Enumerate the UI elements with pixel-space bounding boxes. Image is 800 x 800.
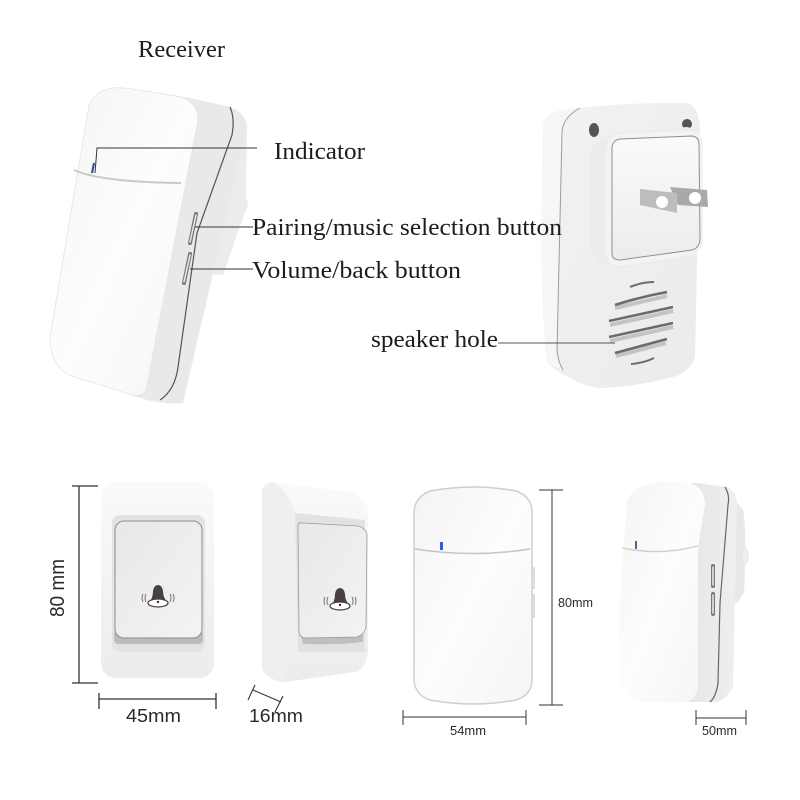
side seam — [710, 487, 729, 702]
receiver seam — [160, 107, 233, 400]
16mm depth dimension — [248, 685, 283, 712]
face groove — [74, 170, 181, 183]
angled plate left edge — [262, 482, 298, 681]
speaker slot highlights — [610, 296, 673, 356]
receiver side view — [619, 482, 748, 702]
side buttons — [711, 566, 715, 614]
receiver front view — [414, 487, 534, 704]
volume button — [184, 254, 190, 283]
right prong — [670, 187, 708, 207]
angled recess shadow — [300, 632, 363, 644]
indicator LED — [635, 541, 637, 549]
receiver body — [50, 88, 247, 404]
pairing button label: Pairing/music selection button — [252, 215, 562, 241]
icon: bell — [324, 588, 356, 610]
transmitter angled view — [262, 482, 368, 682]
80mm label: 80mm — [558, 596, 593, 610]
plug silhouette behind receiver — [205, 125, 248, 275]
80 mm label: 80 mm — [47, 559, 69, 617]
indicator leader line — [95, 148, 257, 173]
angled bell button — [298, 523, 367, 638]
54mm label: 54mm — [450, 724, 486, 738]
prong holes — [656, 192, 701, 208]
plug base — [590, 127, 703, 268]
receiver face — [50, 88, 198, 396]
body seam — [557, 108, 580, 370]
side face — [619, 482, 705, 702]
transmitter plate — [101, 482, 214, 678]
plug plate ring — [606, 131, 703, 266]
80mm height dimension — [539, 490, 563, 705]
recess shadow — [114, 630, 203, 644]
50mm label: 50mm — [702, 724, 737, 738]
45mm label: 45mm — [126, 706, 181, 726]
receiver front body — [414, 487, 532, 704]
50mm width dimension — [696, 710, 746, 725]
back body — [542, 103, 700, 388]
volume leader line — [190, 268, 253, 270]
plug plate — [612, 136, 700, 260]
front groove — [415, 549, 530, 554]
pairing button — [190, 214, 196, 243]
left prong — [640, 189, 677, 213]
angled recess — [295, 513, 365, 652]
mounting holes — [589, 119, 692, 137]
button recess — [112, 515, 205, 652]
indicator LED — [440, 542, 443, 550]
receiver front-side view — [50, 88, 248, 404]
speaker hole leader line — [498, 342, 615, 344]
pairing leader line — [195, 226, 253, 228]
volume button label: Volume/back button — [252, 258, 461, 284]
plug nub — [742, 548, 748, 564]
side buttons — [532, 568, 534, 617]
angled plate — [262, 482, 368, 682]
front rim of body — [542, 108, 580, 370]
rear plug — [725, 500, 745, 603]
45mm width dimension — [99, 693, 216, 709]
transmitter front view — [101, 482, 214, 678]
side groove — [622, 546, 698, 552]
icon: bell — [142, 585, 174, 607]
receiver back view with plug — [542, 103, 708, 388]
16mm label: 16mm — [249, 706, 303, 726]
side body — [643, 483, 737, 702]
indicator label: Indicator — [274, 139, 365, 165]
bell button — [115, 521, 202, 638]
indicator LED — [92, 163, 94, 173]
speaker hole label: speaker hole — [371, 327, 498, 353]
54mm width dimension — [403, 710, 526, 725]
heading: Receiver: Receiver — [138, 37, 225, 63]
80 mm height dimension — [72, 486, 98, 683]
speaker slots — [609, 282, 673, 364]
